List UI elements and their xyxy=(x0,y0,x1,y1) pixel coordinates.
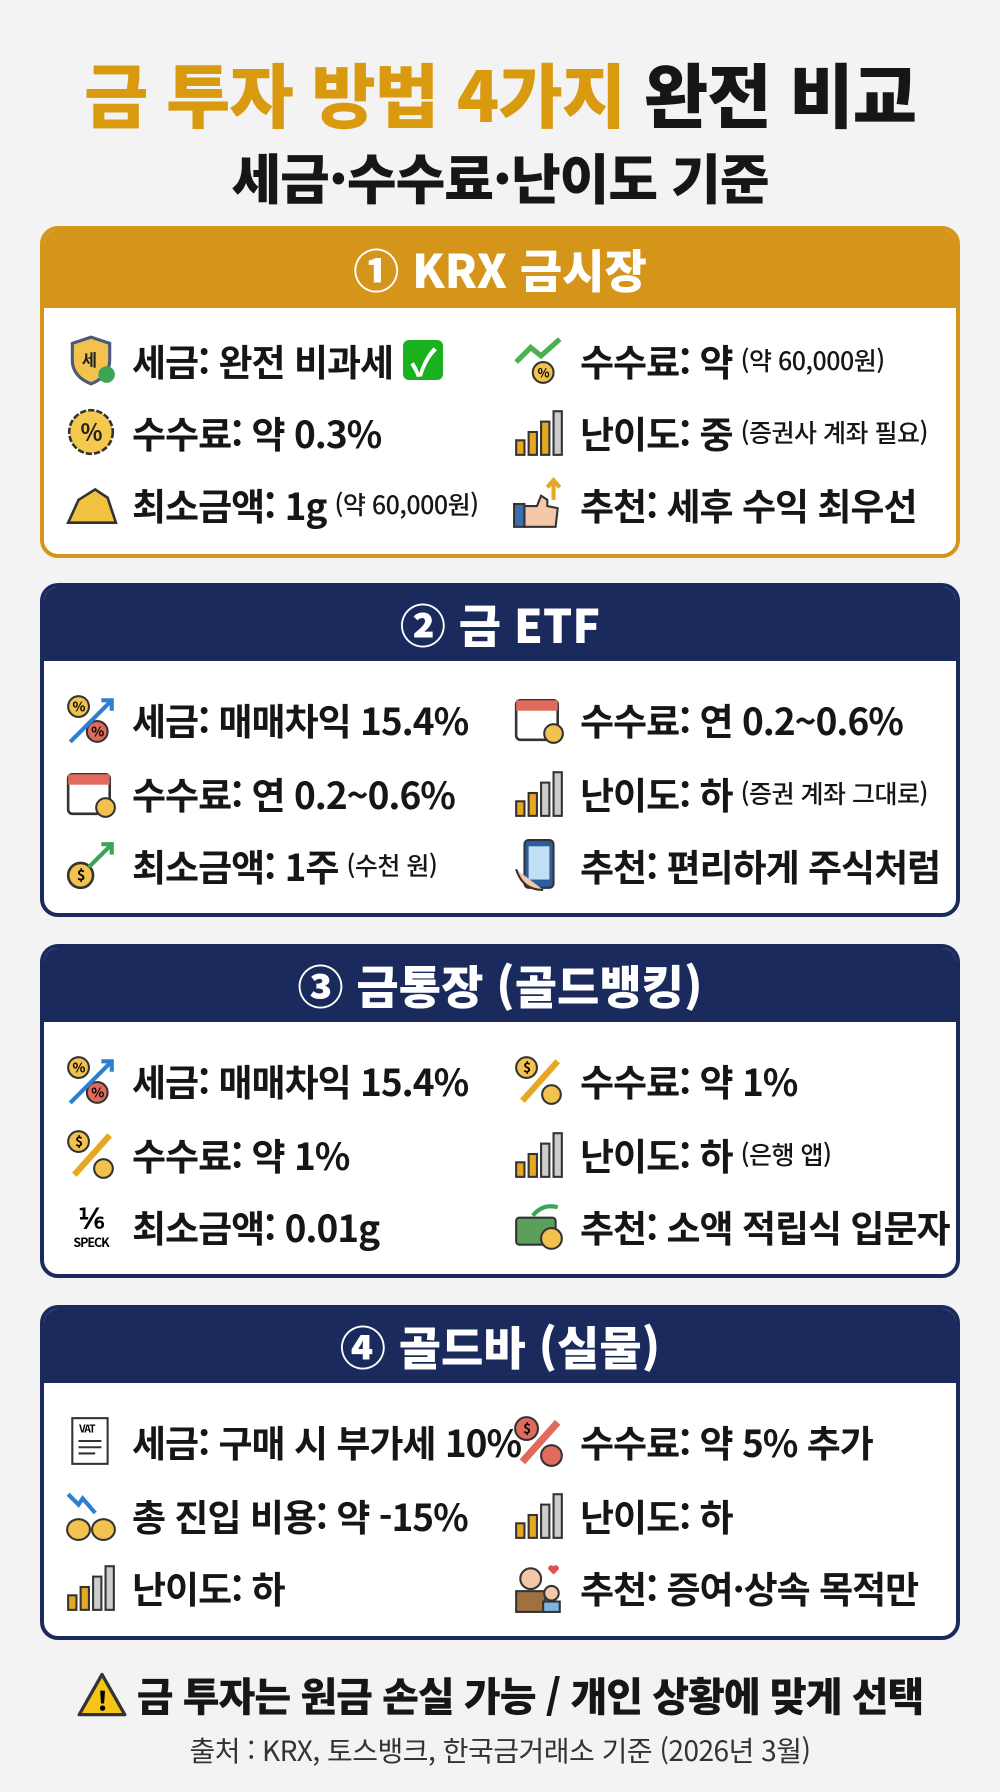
row: tax: 세금: 완전 비과세 xyxy=(132,333,393,387)
row: minimum: 최소금액: 1주 xyxy=(132,838,338,892)
header: gold banking xyxy=(44,948,956,1022)
panel: KRX gold market xyxy=(40,226,960,558)
row: fee: 수수료: 연 0.2~0.6% xyxy=(132,766,455,820)
row: difficulty left xyxy=(67,1560,285,1614)
row: difficulty xyxy=(515,766,928,820)
header: ETF xyxy=(44,587,956,661)
header: KRX xyxy=(44,230,956,308)
row: minimum: 최소금액: 1g xyxy=(132,477,327,531)
row: tax: % xyxy=(91,1082,104,1102)
row: tax: % xyxy=(73,696,86,716)
panel: gold bar xyxy=(40,1305,960,1640)
row: fee right: 수수료: 약 xyxy=(580,333,733,387)
row: difficulty: (증권 계좌 그대로) xyxy=(741,775,928,811)
row: minimum: (수천 원) xyxy=(346,847,437,883)
row: fee right: 수수료: 약 1% xyxy=(580,1053,797,1107)
row: tax: % xyxy=(73,1057,86,1077)
row: minimum: (약 60,000원) xyxy=(335,486,479,522)
panel: gold banking xyxy=(40,944,960,1278)
row: fee right: 수수료: 약 5% 추가 xyxy=(580,1414,873,1468)
row: fee: $ xyxy=(75,1131,83,1151)
row: difficulty: (은행 앱) xyxy=(741,1136,831,1172)
row: recommendation: 추천: 소액 적립식 입문자 xyxy=(580,1199,950,1253)
row: difficulty: 난이도: 중 xyxy=(580,405,733,459)
row: recommendation: 추천: 편리하게 주식처럼 xyxy=(580,838,940,892)
row: fee right: % xyxy=(538,364,550,382)
row: fee right: $ xyxy=(523,1418,531,1438)
row: minimum xyxy=(66,477,479,531)
row: fee: 수수료: 약 1% xyxy=(132,1127,349,1181)
row: recommendation: 추천: 증여·상속 목적만 xyxy=(580,1560,918,1614)
row: total cost: 총 진입 비용: 약 -15% xyxy=(132,1488,468,1542)
row: tax: 세금: 매매차익 15.4% xyxy=(132,692,468,746)
row: difficulty left: 난이도: 하 xyxy=(132,1560,285,1614)
row: fee: 수수료: 약 0.3% xyxy=(132,405,381,459)
row: difficulty: (증권사 계좌 필요) xyxy=(741,414,928,450)
row: difficulty right xyxy=(515,1488,733,1542)
row: difficulty xyxy=(515,405,928,459)
row: difficulty xyxy=(515,1127,831,1181)
row: fee: % xyxy=(81,414,103,447)
row: difficulty: 난이도: 하 xyxy=(580,766,733,820)
row: tax: VAT xyxy=(78,1421,96,1436)
row: minimum: 최소금액: 0.01g xyxy=(132,1199,379,1253)
row: fee right: 수수료: 연 0.2~0.6% xyxy=(580,692,903,746)
row: tax: 세금: 구매 시 부가세 10% xyxy=(132,1414,521,1468)
header: gold banking: ③ 금통장 (골드뱅킹) xyxy=(298,952,702,1018)
title: 금 투자 방법 4가지 완전 비교 xyxy=(84,42,916,143)
warning note: 금 투자는 원금 손실 가능 / 개인 상황에 맞게 선택 xyxy=(137,1665,923,1723)
row: tax: 세 xyxy=(82,347,96,371)
header: KRX: ① KRX 금시장 xyxy=(353,236,647,302)
header: gold bar xyxy=(44,1309,956,1383)
subtitle: 세금·수수료·난이도 기준 xyxy=(231,136,769,215)
source: 출처 : KRX, 토스뱅크, 한국금거래소 기준 (2026년 3월) xyxy=(190,1730,810,1770)
row: fee right: (약 60,000원) xyxy=(741,342,885,378)
row: minimum xyxy=(66,838,437,892)
header: gold bar: ④ 골드바 (실물) xyxy=(340,1313,660,1379)
row: minimum: $ xyxy=(77,865,85,886)
header: ETF: ② 금 ETF xyxy=(400,591,600,657)
row: tax: ✓ xyxy=(410,333,436,387)
row: difficulty right: 난이도: 하 xyxy=(580,1488,733,1542)
panel: gold ETF xyxy=(40,583,960,917)
row: difficulty: 난이도: 하 xyxy=(580,1127,733,1181)
row: recommendation: 추천: 세후 수익 최우선 xyxy=(580,477,917,531)
row: tax: % xyxy=(91,721,104,741)
row: minimum: SPECK xyxy=(73,1233,110,1251)
row: fee right: $ xyxy=(523,1057,531,1077)
row: tax: 세금: 매매차익 15.4% xyxy=(132,1053,468,1107)
row: fee right xyxy=(514,333,885,387)
